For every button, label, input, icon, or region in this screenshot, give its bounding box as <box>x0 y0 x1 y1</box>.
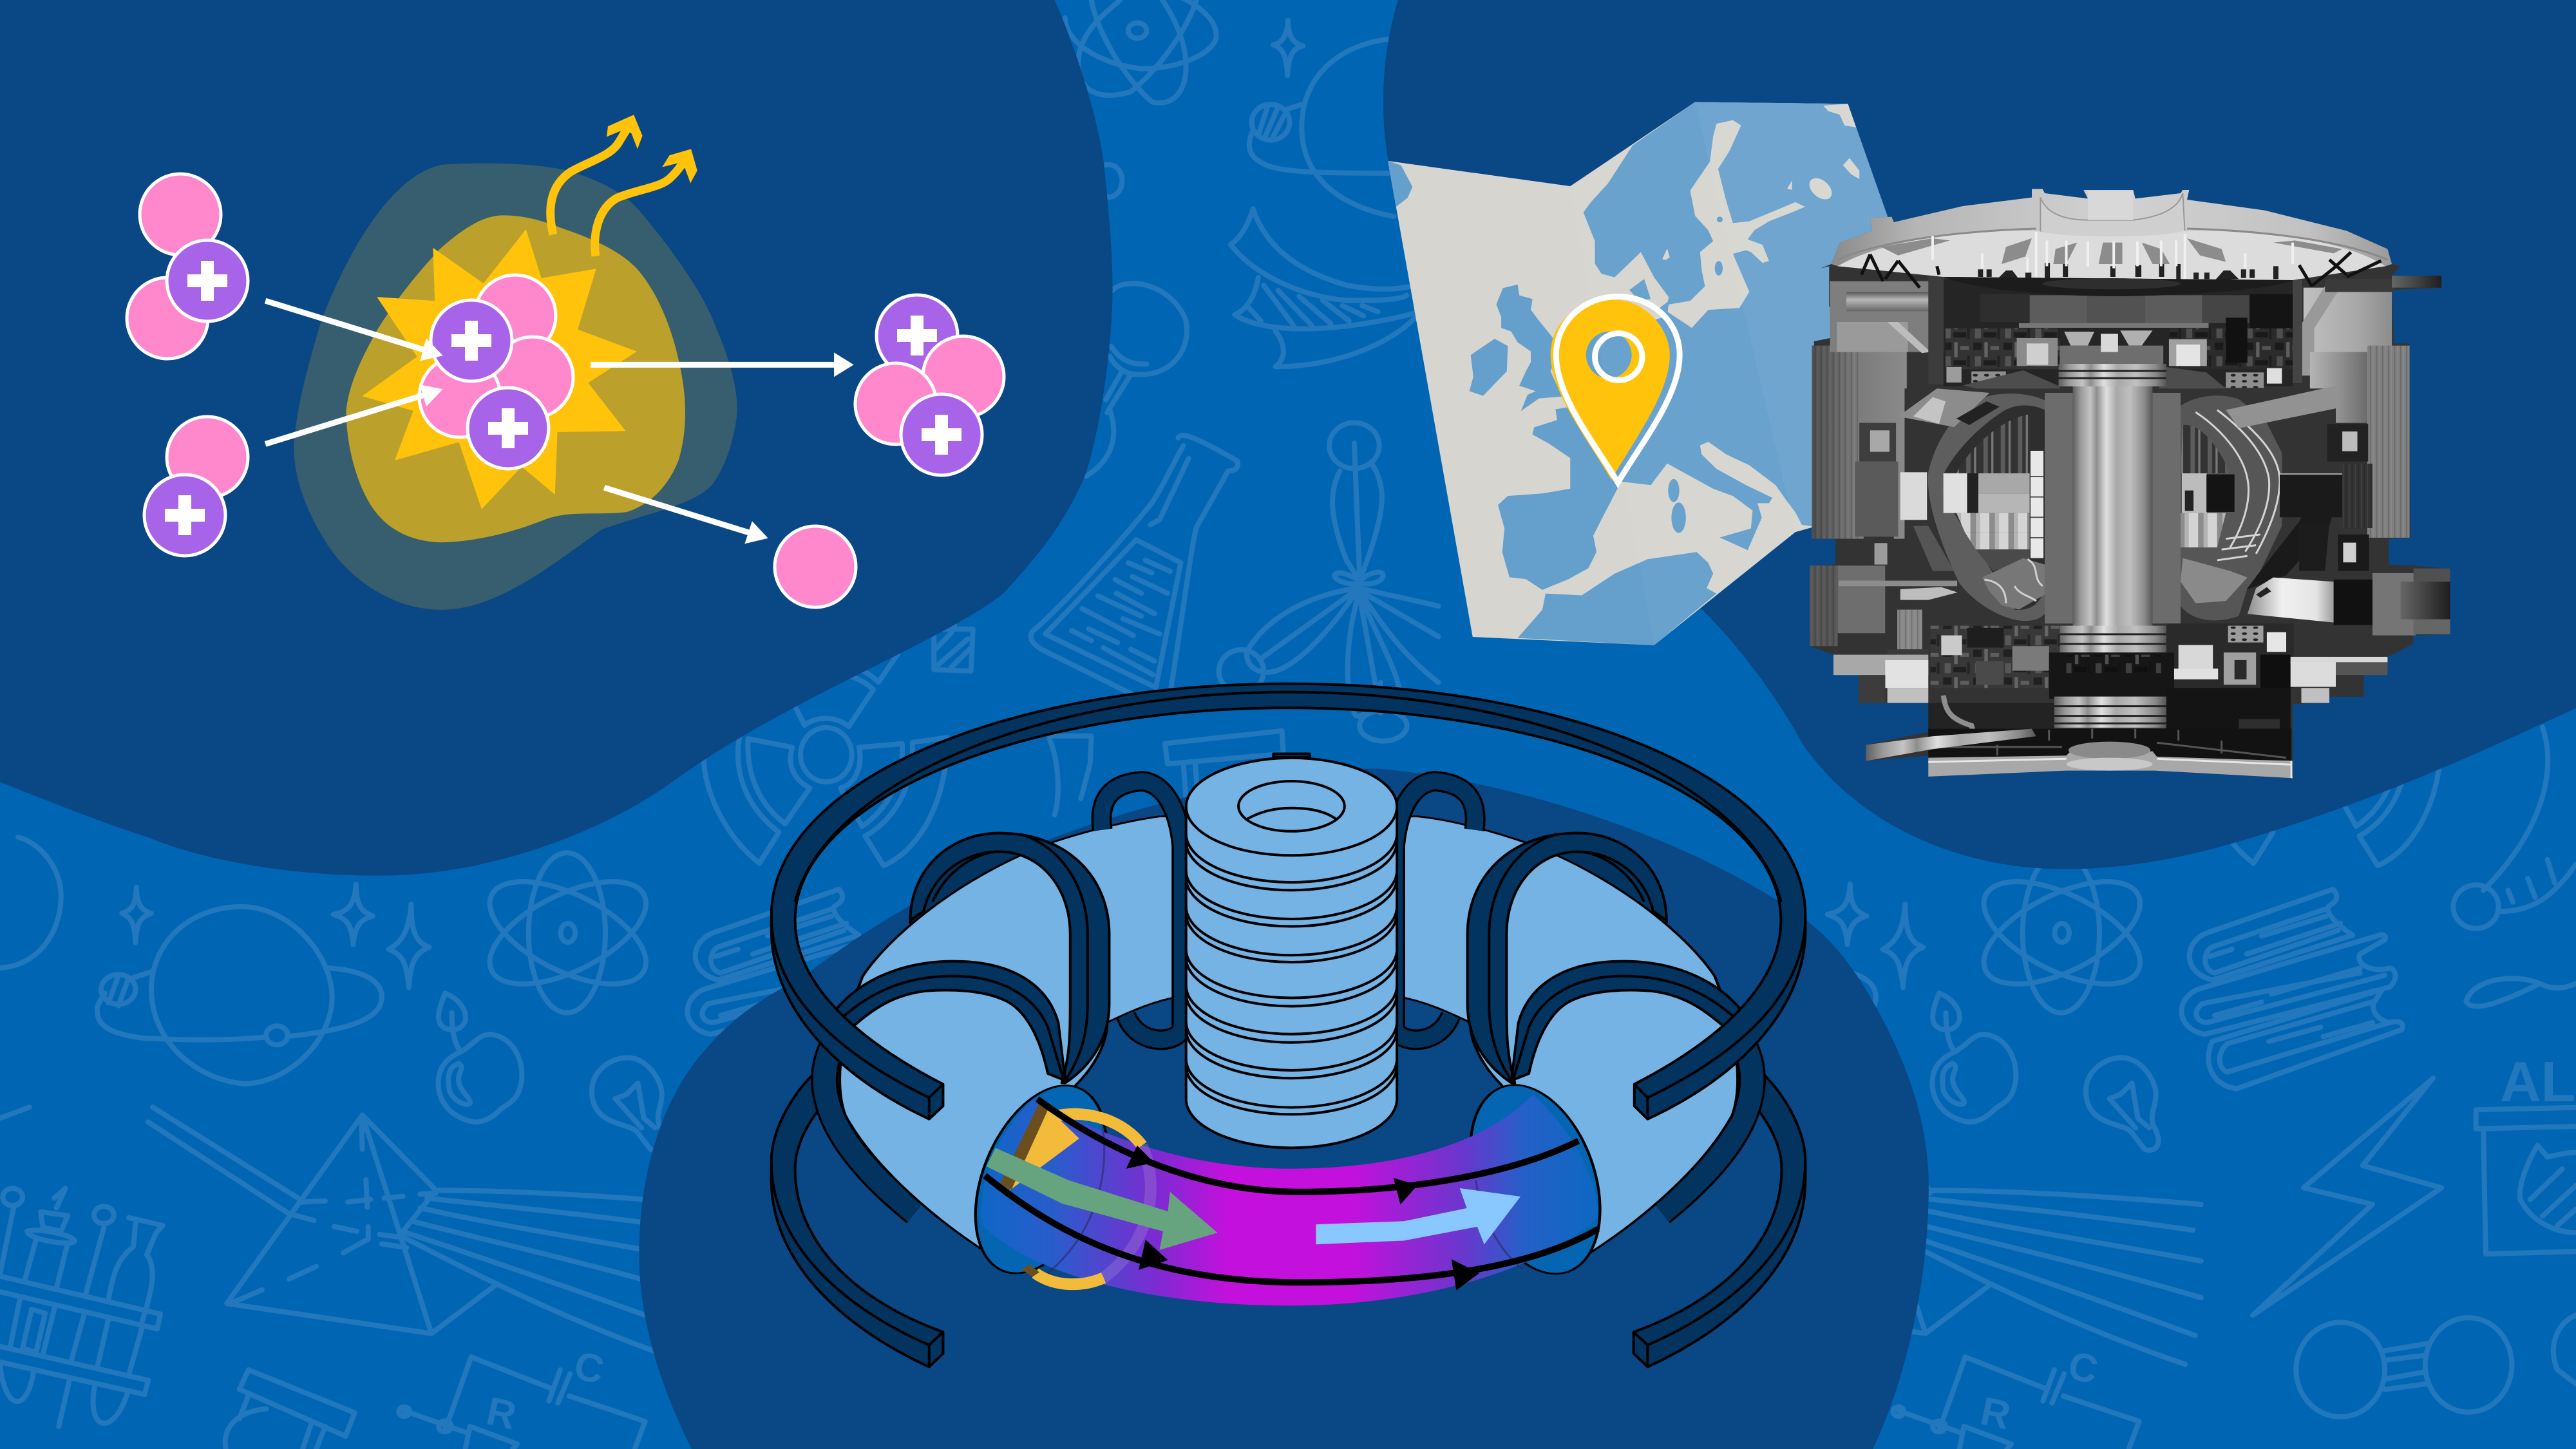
heating antenna dark edge <box>999 1103 1049 1189</box>
toroidal coil back right part <box>1508 833 1667 923</box>
lower boxes <box>1941 626 2286 685</box>
energy halo inner <box>346 215 685 542</box>
map sea: North Sea <box>1569 146 1669 328</box>
doodles: top centre atom, planet, flasks and flower <box>1031 0 1439 815</box>
interior equipment right <box>2170 328 2293 369</box>
tritium atom <box>144 417 248 556</box>
North Africa <box>1518 552 1716 645</box>
map land: mainland Europe <box>1498 102 1910 590</box>
map sea: Baltic <box>1667 120 1805 328</box>
left white strip <box>2031 451 2043 558</box>
right dark D ring section <box>2222 475 2344 599</box>
perforated plates upper <box>1946 367 2282 388</box>
cone hanger rods <box>1933 232 2293 279</box>
right upper chamber dark <box>2181 405 2277 592</box>
map paper <box>1388 102 1910 645</box>
right chamber stripes top <box>2181 425 2230 473</box>
solenoid bottom flange <box>2058 626 2166 652</box>
upper poloidal coil <box>772 684 1805 1119</box>
right mid wall <box>2310 352 2368 423</box>
left strut <box>1888 322 1931 353</box>
lower poloidal coil, left <box>772 1069 943 1367</box>
reaction arrows <box>265 301 854 544</box>
background doodle pattern tile: C <box>570 1343 608 1393</box>
inner legs left <box>2045 393 2073 623</box>
right D ring <box>2171 395 2282 620</box>
left wall stripes <box>1812 346 1859 539</box>
far right dark barrel <box>2400 582 2450 620</box>
toroidal coil back left part <box>910 833 1069 923</box>
left lower box <box>1864 536 1894 573</box>
upper shoulders <box>1928 277 2304 412</box>
burner and circuit <box>225 1370 355 1449</box>
pipe bundle <box>2301 279 2344 375</box>
upper left dark segment <box>1956 401 2000 425</box>
rear coil, left <box>1101 781 1182 1039</box>
cross-section front rim <box>1048 1115 1522 1273</box>
heating ring brown clip <box>1021 1265 1039 1277</box>
solenoid top flange <box>2058 364 2166 386</box>
interior equipment left <box>1946 328 2060 369</box>
map top-left corner land <box>1388 161 1412 207</box>
doodles: right edge board and tool <box>2453 727 2576 1384</box>
dome <box>1832 189 2392 266</box>
right pipe dark collar <box>2325 279 2394 292</box>
doodle: radiation symbol <box>704 612 973 866</box>
lower left interior <box>1931 626 2060 688</box>
reactor silhouette <box>1810 189 2450 778</box>
map islands <box>1662 104 1859 260</box>
main inner body <box>1904 388 2336 639</box>
interior tall block <box>2226 317 2248 363</box>
right upper wall <box>2304 288 2392 353</box>
interior back panels <box>1980 294 2293 367</box>
diagnostic pipe <box>1866 729 2036 761</box>
background doodle pattern tile: R <box>482 1389 520 1439</box>
dark band under dome <box>1944 277 2293 296</box>
solenoid bore <box>1238 781 1345 831</box>
left upper housing <box>1830 281 1944 352</box>
background doodles repeated on the right <box>1494 612 2512 1449</box>
upper right port <box>2226 385 2339 428</box>
background doodle pattern tile <box>0 612 1018 1449</box>
diagram: nuclear fusion reaction <box>127 115 1004 610</box>
left lower frame box top <box>1859 423 1896 462</box>
colliding nucleus <box>419 275 573 469</box>
left lower frame mid <box>1855 462 1898 536</box>
right lower port dark hatch <box>2256 587 2271 598</box>
side coil, right <box>1468 833 1667 1083</box>
left chamber panel row mid <box>1946 494 2030 513</box>
central solenoid column <box>2073 385 2152 629</box>
deck <box>1928 729 2291 760</box>
pin outline <box>1556 296 1680 482</box>
left mid white port <box>1900 472 1927 520</box>
inner legs right <box>2152 393 2181 623</box>
left chamber panel lights <box>1944 473 1967 513</box>
top equipment frames <box>2017 330 2207 366</box>
lower ring stack <box>2054 697 2166 728</box>
map small land and sea details <box>1388 161 1723 645</box>
torus vessel <box>840 817 1738 1260</box>
right chamber lattice <box>2195 410 2280 560</box>
torus cross-section right <box>1450 1078 1620 1280</box>
base centre lower disc <box>2067 758 2152 771</box>
right diagnostic pipe <box>2392 276 2441 288</box>
right truss <box>2299 252 2381 287</box>
left wide lower panel <box>1810 565 1885 633</box>
right lower black block <box>2334 580 2373 625</box>
lower side dark <box>1928 703 2054 732</box>
interior back wall <box>1944 279 2293 386</box>
Great Britain <box>1496 285 1562 411</box>
left chamber lower stripes <box>1956 513 2030 533</box>
plasma current arrow <box>1316 1188 1520 1244</box>
base plate edge <box>1928 759 2291 778</box>
flange grooves <box>2058 371 2166 644</box>
cone dark wedges <box>1881 238 2342 264</box>
panel: bottom-centre dark blob <box>639 769 1929 1449</box>
pipework curve <box>1944 696 1974 732</box>
cutaway of fusion reactor <box>1810 189 2450 778</box>
free neutron <box>775 526 856 607</box>
left lower housing <box>1837 322 1908 352</box>
right mid dark port <box>2280 473 2342 517</box>
left strip segments <box>2031 477 2043 538</box>
doodles: planet, stars, atom, apple, bulb <box>0 837 707 1449</box>
solenoid top tab <box>1273 753 1310 757</box>
right lower white port <box>2248 578 2334 623</box>
right chamber lower stripes <box>2181 513 2226 547</box>
left divertor <box>1982 558 2045 610</box>
heating antenna <box>1009 1108 1079 1191</box>
left truss <box>1861 254 1939 288</box>
torus cross-section left <box>953 1077 1129 1281</box>
front coil, right <box>1511 961 1742 1081</box>
energy arrows <box>551 115 697 256</box>
heating ring upper <box>1055 1114 1142 1146</box>
map fold shading right panel <box>1695 102 1910 532</box>
neutral beam arrow <box>987 1148 1218 1250</box>
plasma <box>981 1094 1598 1305</box>
right chamber panels <box>2182 473 2207 513</box>
Ireland <box>1470 339 1508 396</box>
explosion star <box>362 229 637 509</box>
side coil, left <box>910 833 1109 1083</box>
left chamber bottom <box>1976 549 2030 571</box>
left D ring <box>1928 393 2054 621</box>
heating ring translucent side <box>1104 1146 1151 1278</box>
magnetic field lines <box>985 1099 1598 1291</box>
right lower stripes box <box>2342 464 2372 528</box>
folded map of Europe <box>1388 102 1910 645</box>
heating ring lower <box>1036 1273 1104 1284</box>
right lower box <box>2338 535 2369 571</box>
solenoid segment lines <box>1186 807 1397 1114</box>
toroidal coil lower leg, right <box>1662 1041 1752 1213</box>
left lower port <box>1900 587 1958 600</box>
helium nucleus <box>855 295 1004 475</box>
test tube rack <box>0 1276 160 1394</box>
left slanted frame <box>1913 526 1954 571</box>
dome top cap <box>2088 191 2133 220</box>
left horizontal pipes <box>1839 581 1957 586</box>
cone struts <box>1978 263 2278 281</box>
deck beams <box>1933 729 2286 758</box>
central solenoid <box>1186 753 1397 1148</box>
base centre upper disc <box>2069 742 2150 759</box>
tokamak schematic <box>772 684 1805 1367</box>
doodles: books, lightning, dumbbell <box>687 889 1018 1417</box>
left barrel <box>1846 292 1937 311</box>
pin body <box>1551 299 1670 480</box>
right divertor <box>2181 558 2248 603</box>
cone rim shadow <box>1838 229 2387 260</box>
map fold shading middle panel <box>1570 102 1795 645</box>
lower poloidal coil, right <box>1634 1069 1805 1367</box>
right ledge <box>2291 657 2387 663</box>
front coil, left <box>835 961 1065 1081</box>
right outer stripes <box>2367 346 2410 538</box>
left stacked block <box>1888 649 1928 658</box>
right lower box frame <box>2299 524 2329 571</box>
left chamber upper stripes <box>1956 414 2030 473</box>
right upper box <box>2327 424 2368 462</box>
panel: top-left dark blob <box>0 0 1113 876</box>
interior ring band <box>2019 323 2209 328</box>
energy halo outer <box>294 164 737 610</box>
left outer wall <box>1812 346 1907 539</box>
cone underside <box>1838 231 2385 280</box>
left stacked bars <box>1897 610 1922 649</box>
left chamber panel row top <box>1944 473 2030 494</box>
solenoid body <box>1186 758 1397 1148</box>
location pin <box>1551 296 1680 482</box>
central disc on band <box>2043 278 2181 289</box>
panel: top-right dark blob <box>1383 0 2576 869</box>
left ledge <box>1833 655 1928 675</box>
far right block <box>2372 573 2416 636</box>
pin hole ring <box>1595 334 1642 381</box>
lower right interior <box>2166 623 2293 688</box>
upper left port <box>1898 388 1989 427</box>
base plate <box>1928 752 2293 778</box>
deuterium atom <box>127 174 248 359</box>
rear coil, right <box>1395 781 1475 1039</box>
left leg white <box>1885 660 1928 688</box>
centre lower dark <box>2049 652 2174 699</box>
prism <box>148 1107 497 1334</box>
toroidal coil lower leg, left <box>824 1041 915 1213</box>
dome saddle <box>2040 193 2185 240</box>
left chamber interior <box>1944 406 2045 610</box>
